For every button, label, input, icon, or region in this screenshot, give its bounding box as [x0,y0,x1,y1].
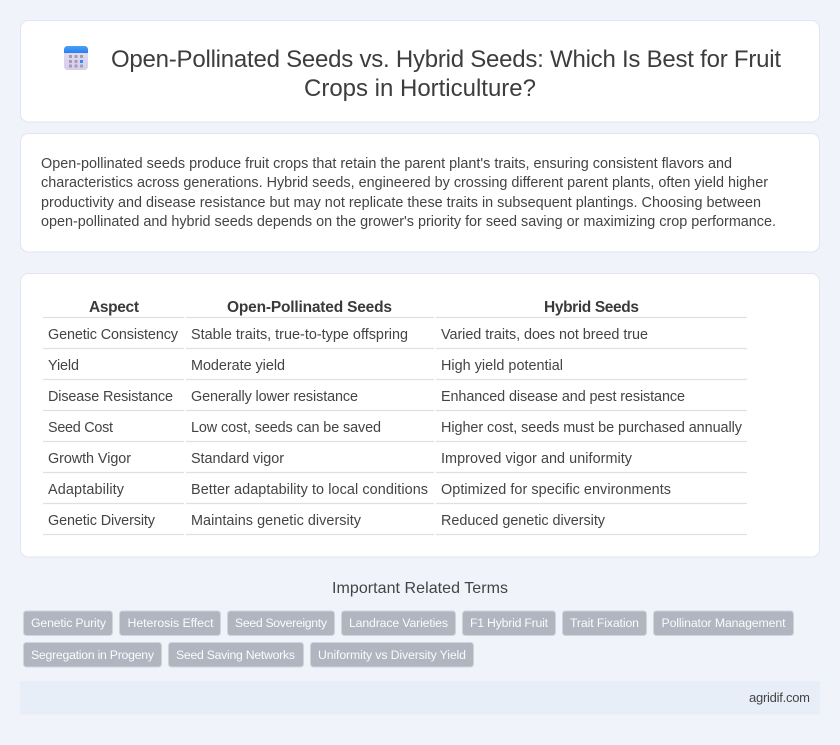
text block: introduction paragraph: productivity and disease resistance but may not replicate these traits in subsequent plantings. Choosing between [41,195,761,211]
table header row: Open-Pollinated Seeds [227,299,392,316]
panel: comparison table [20,274,820,557]
row: growth vigor: Standard vigor [191,451,284,467]
text block: introduction paragraph: characteristics across generations. Hybrid seeds, engineered by crossing different parent plants, often yield higher [41,175,768,191]
row: yield: Yield [48,358,79,374]
tags: related terms: Uniformity vs Diversity Yield [318,648,466,662]
row: genetic diversity: Reduced genetic diversity [441,513,606,529]
row: genetic consistency: Varied traits, does not breed true [441,327,648,343]
tags: related terms: Segregation in Progeny [31,648,155,662]
table header row: Hybrid Seeds [544,299,639,316]
row: genetic consistency: Stable traits, true-to-type offspring [191,327,408,343]
panel: header [20,20,820,122]
tags: related terms: Seed Sovereignty [235,616,328,630]
tags: related terms: Landrace Varieties [349,616,448,630]
tags: related terms [24,611,794,667]
row: growth vigor: Growth Vigor [48,451,131,467]
text block: introduction paragraph [41,156,776,230]
row: seed cost: Higher cost, seeds must be purchased annually [441,420,743,436]
panel: introduction [20,134,820,252]
tags: related terms: Pollinator Management [662,616,786,630]
title [111,46,781,102]
title: Crops in Horticulture? [304,75,536,102]
row: yield: High yield potential [441,358,563,374]
text block: introduction paragraph: Open-pollinated seeds produce fruit crops that retain the parent plant's traits, ensuring consistent flavors and [41,156,732,172]
text block: introduction paragraph: open-pollinated and hybrid seeds depends on the grower's priority for seed saving or maximizing crop performance. [41,214,776,230]
tags: related terms: Heterosis Effect [128,616,214,630]
row: disease resistance: Generally lower resistance [191,389,358,405]
row: seed cost [48,420,743,436]
heading: important related terms: Important Related Terms [332,580,508,597]
row: adaptability: Optimized for specific environments [441,482,671,498]
row: disease resistance [48,389,685,405]
tags: related terms: F1 Hybrid Fruit [470,616,549,630]
table header row [89,299,639,316]
row: growth vigor [48,451,633,467]
tags: related terms: Trait Fixation [570,616,639,630]
row: disease resistance: Disease Resistance [48,389,173,405]
row: yield: Moderate yield [191,358,285,374]
row: genetic consistency [48,327,648,343]
row: adaptability: Better adaptability to local conditions [191,482,428,498]
row: seed cost: Seed Cost [48,420,113,436]
row: adaptability [48,482,671,498]
row: growth vigor: Improved vigor and uniformity [441,451,633,467]
footer: agridif.com [749,690,810,705]
icon: calendar [64,46,88,70]
row: adaptability: Adaptability [48,482,125,498]
footer [20,681,820,714]
tags: related terms: Genetic Purity [31,616,107,630]
row: seed cost: Low cost, seeds can be saved [191,420,381,436]
row: genetic diversity [48,513,606,529]
tags: related terms: Seed Saving Networks [176,648,295,662]
row: yield [48,358,563,374]
row: genetic diversity: Maintains genetic diversity [191,513,362,529]
row: genetic diversity: Genetic Diversity [48,513,156,529]
row: disease resistance: Enhanced disease and pest resistance [441,389,685,405]
row: genetic consistency: Genetic Consistency [48,327,179,343]
title: Open-Pollinated Seeds vs. Hybrid Seeds: Which Is Best for Fruit [111,46,781,73]
table header row: Aspect [89,299,139,316]
